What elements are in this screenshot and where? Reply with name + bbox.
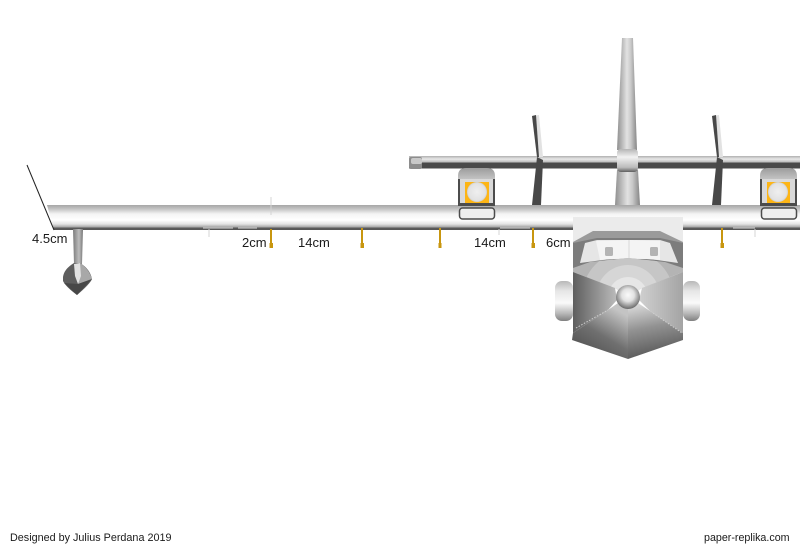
spray rails: [576, 310, 608, 328]
windscreen: [580, 240, 678, 263]
cockpit side shadow: [573, 238, 683, 268]
vertical tail fin: [615, 38, 640, 205]
right engine nacelle: [760, 168, 797, 219]
measurement labels: [32, 231, 571, 250]
left main wheel: [555, 281, 573, 321]
measurement labels: 14cm: [298, 235, 330, 250]
windscreen panes: [596, 240, 628, 260]
wing tip guide line: [27, 165, 54, 230]
wing underside flap details: [203, 197, 755, 237]
fuselage side right: [639, 272, 683, 333]
hull lower left: [572, 303, 628, 359]
measurement labels: 2cm: [242, 235, 267, 250]
nose dome: [573, 258, 683, 290]
measurement labels: 14cm: [474, 235, 506, 250]
nose spinner: [616, 285, 640, 309]
right tailplane endplate fin: [712, 115, 723, 205]
main wing: [47, 205, 800, 230]
fuselage side left: [573, 272, 617, 333]
gold alignment tabs: [270, 228, 724, 248]
wing tip float: [63, 229, 92, 295]
measurement labels: 6cm: [546, 235, 571, 250]
hull lower right: [628, 303, 683, 359]
fuselage front: [570, 217, 686, 359]
tail fin hub: [617, 149, 638, 172]
cockpit roof: [573, 231, 683, 272]
horizontal tailplane: [409, 156, 800, 169]
fuselage upper fairing: [573, 217, 683, 273]
cockpit instrument details: [605, 247, 613, 256]
right main wheel: [683, 281, 700, 321]
left engine nacelle: [458, 168, 495, 219]
measurement labels: 4.5cm: [32, 231, 67, 246]
website credit: paper-replika.com: [704, 532, 790, 544]
left tailplane endplate fin: [532, 115, 543, 205]
designer credit: Designed by Julius Perdana 2019: [10, 532, 171, 544]
